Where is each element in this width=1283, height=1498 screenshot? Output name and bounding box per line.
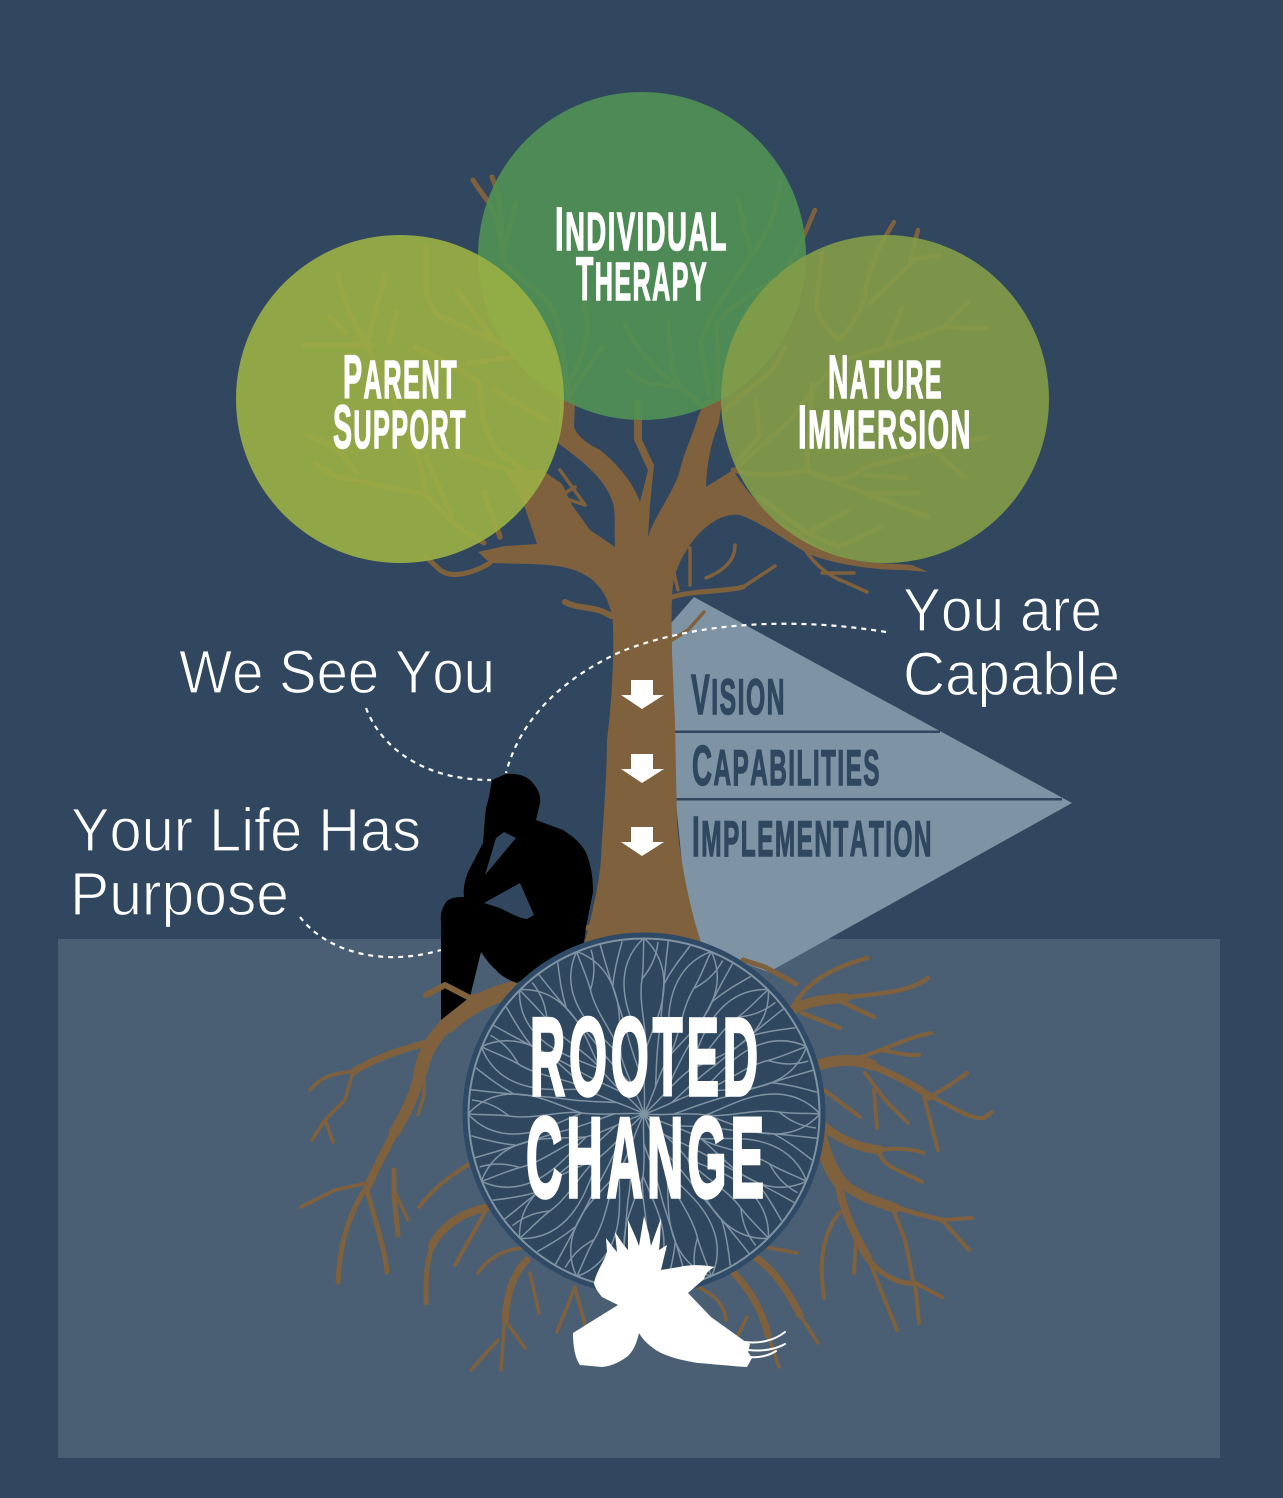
circle: parent support bbox=[236, 235, 564, 563]
heading: nature immersion: NATURE bbox=[828, 343, 943, 411]
text: CHANGE bbox=[526, 1095, 768, 1222]
text: you are capable bbox=[903, 576, 1120, 708]
heading: individual therapy: THERAPY bbox=[576, 245, 708, 313]
label: vision: VISION bbox=[691, 663, 786, 727]
heading: individual therapy bbox=[555, 195, 728, 313]
text: your life has purpose: Purpose bbox=[70, 860, 289, 928]
text: your life has purpose bbox=[70, 796, 421, 928]
circle: individual therapy bbox=[478, 92, 806, 420]
heading: nature immersion: IMMERSION bbox=[798, 393, 972, 461]
panel: vision arrow triangle bbox=[660, 597, 1072, 972]
text: IMPLEMENTATION bbox=[692, 805, 933, 869]
text: we see you: We See You bbox=[179, 638, 495, 706]
tree trunk and branches bbox=[304, 177, 986, 945]
heading: parent support bbox=[333, 343, 467, 461]
text: you are capable: Capable bbox=[903, 640, 1120, 708]
icon: down arrows on trunk bbox=[621, 680, 664, 856]
icon: white bird bbox=[573, 1216, 785, 1367]
emblem: rooted change disc bbox=[464, 934, 824, 1294]
root wrapping over person leg bbox=[426, 985, 505, 998]
text: ROOTED bbox=[530, 996, 762, 1119]
dashed connectors bbox=[300, 624, 886, 957]
icon: thinking person silhouette bbox=[441, 774, 593, 1020]
ground panel bbox=[58, 939, 1220, 1458]
heading: parent support: SUPPORT bbox=[333, 393, 467, 461]
title: rooted change bbox=[526, 996, 768, 1222]
label: capabilities: CAPABILITIES bbox=[692, 734, 881, 798]
text: your life has purpose: Your Life Has bbox=[71, 796, 421, 864]
heading: individual therapy: INDIVIDUAL bbox=[555, 195, 728, 263]
circle: nature immersion bbox=[721, 235, 1049, 563]
text: you are capable: You are bbox=[903, 576, 1102, 644]
tree roots bbox=[301, 925, 992, 1370]
heading: nature immersion bbox=[798, 343, 972, 461]
heading: parent support: PARENT bbox=[343, 343, 458, 411]
